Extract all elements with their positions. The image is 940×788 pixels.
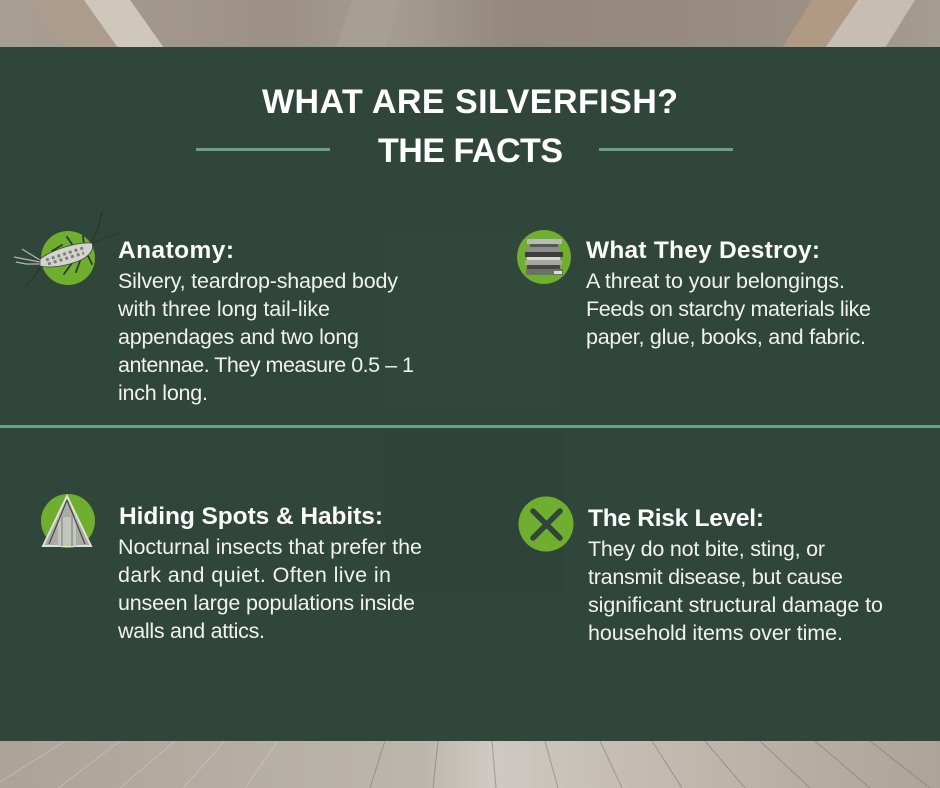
text: risk body: They do not bite, sting, or [588, 537, 825, 561]
text: hiding body: Nocturnal insects that prefer the [118, 535, 422, 559]
text: anatomy body: Silvery, teardrop-shaped body [118, 269, 398, 293]
text: risk body: significant structural damage to [588, 593, 883, 617]
text: anatomy body: antennae. They measure 0.5 – 1 [118, 353, 414, 377]
text: anatomy body [117, 269, 414, 405]
panel: risk level [518, 496, 883, 645]
title [262, 83, 678, 170]
text: hiding body: walls and attics. [117, 619, 265, 643]
text: risk body: transmit disease, but cause [588, 565, 843, 589]
text: risk body [588, 537, 883, 645]
text: anatomy body: appendages and two long [118, 325, 359, 349]
icon: a-frame cabin [41, 494, 95, 548]
heading: risk level: The Risk Level: [588, 505, 764, 532]
panel: hiding spots [41, 494, 422, 643]
icon: silverfish [14, 212, 120, 286]
panel: what they destroy [517, 230, 871, 349]
text: hiding body [117, 535, 422, 643]
heading: what they destroy: What They Destroy: [586, 237, 820, 264]
ceiling photo strip [0, 0, 940, 48]
heading: hiding spots: Hiding Spots & Habits: [119, 503, 383, 530]
text: hiding body: dark and quiet. Often live in [118, 563, 391, 587]
text: risk body: household items over time. [588, 621, 843, 645]
title: THE FACTS [378, 132, 563, 170]
text: destroy body: paper, glue, books, and fabric. [586, 325, 866, 349]
heading: anatomy: Anatomy: [118, 237, 234, 264]
panel: anatomy [14, 212, 414, 405]
title rule right [599, 148, 733, 151]
text: destroy body: Feeds on starchy materials like [586, 297, 871, 321]
title: WHAT ARE SILVERFISH? [262, 83, 678, 121]
text: destroy body: A threat to your belongings. [586, 269, 845, 293]
icon: stack of books [517, 230, 571, 284]
text: hiding body: unseen large populations inside [118, 591, 415, 615]
text: anatomy body: inch long. [118, 381, 208, 405]
text: destroy body [586, 269, 871, 349]
horizontal section divider [0, 425, 940, 428]
title rule left [196, 148, 330, 151]
icon: x mark [518, 496, 574, 552]
text: anatomy body: with three long tail-like [117, 297, 330, 321]
floor photo strip [0, 740, 940, 788]
